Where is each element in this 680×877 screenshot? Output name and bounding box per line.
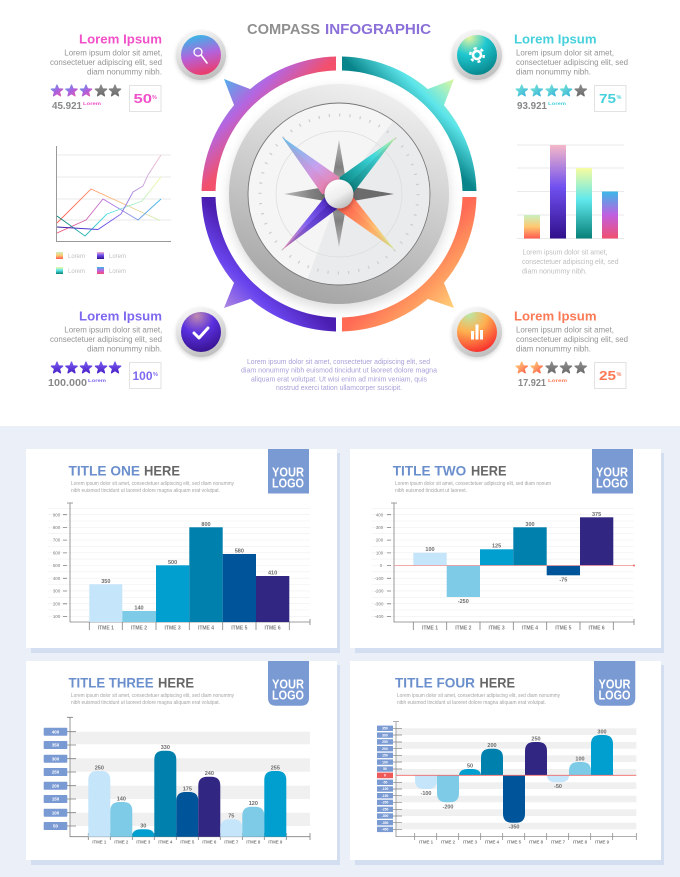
body text (50, 326, 162, 354)
logo: YOUR (598, 677, 630, 691)
heading: HERE (471, 463, 506, 479)
logo: YOUR (596, 465, 628, 479)
body text (50, 48, 162, 76)
body text: diam nonummy nibh. (87, 344, 162, 354)
logo: LOGO (272, 477, 304, 491)
logo (592, 449, 633, 494)
rounded bar chart: items 1 to 9: ITME 9 (268, 840, 283, 844)
logo: YOUR (272, 465, 304, 479)
percent box (594, 362, 626, 388)
bar chart: items 1 to 6: 900 (53, 512, 61, 517)
rounded bar chart: positive and negative values: -200 (382, 801, 389, 805)
rounded bar chart: positive and negative values: ITME 3 (463, 840, 478, 844)
rounded bar chart: items 1 to 9: 400 (52, 729, 60, 734)
block: top left (50, 30, 226, 112)
rounded bar chart: positive and negative values: -50 (383, 780, 388, 784)
block: bottom right (452, 307, 628, 389)
star rating (516, 362, 586, 373)
rounded bar chart: positive and negative values: ITME 1 (419, 840, 434, 844)
bar chart: positive and negative values: ITME 6 (589, 626, 605, 632)
rounded bar chart: positive and negative values: ITME 7 (551, 840, 566, 844)
number: Lorem (548, 378, 567, 383)
bar chart: items 1 to 6: 500 (168, 560, 177, 566)
description (395, 481, 551, 494)
panel: title four (350, 661, 664, 865)
title (247, 22, 432, 38)
description: nibh euismod tincidunt ut laoreet. (395, 488, 467, 494)
rounded bar chart: positive and negative values: 150 (382, 754, 388, 758)
heading: TITLE TWO (393, 463, 466, 479)
body text: Lorem ipsum dolor sit amet, (516, 326, 614, 334)
rounded bar chart: positive and negative values: -350 (508, 824, 520, 830)
line chart legend: Lorem (68, 254, 85, 260)
grey compass star (284, 140, 394, 247)
ring segment: top right (342, 57, 476, 191)
small gradient bar chart (517, 145, 624, 238)
rounded bar chart: items 1 to 9: 140 (117, 796, 126, 802)
logo (268, 661, 309, 706)
rounded bar chart: positive and negative values: 50 (467, 764, 473, 770)
rounded bar chart: positive and negative values: -50 (554, 784, 562, 790)
bar chart: positive and negative values: -400 (375, 614, 384, 619)
colour needles (282, 137, 396, 250)
bar chart: positive and negative values: ITME 5 (555, 626, 572, 632)
rounded bar chart: items 1 to 9: 200 (52, 783, 60, 788)
bar chart: positive and negative values: -75 (559, 578, 567, 584)
bar chart: items 1 to 6: ITME 4 (198, 626, 214, 632)
compass hub (324, 180, 354, 211)
title: INFOGRAPHIC (325, 22, 432, 38)
number: Lorem (548, 101, 566, 106)
rounded bar chart: items 1 to 9 (44, 717, 310, 844)
description: nibh euismod tincidunt ut laoreet dolore magna aliquam erat volutpat. (71, 488, 220, 494)
rounded bar chart: items 1 to 9: ITME 8 (246, 840, 261, 844)
percent box: 100 (132, 369, 153, 383)
description (71, 693, 234, 706)
bar chart: positive and negative values: -250 (458, 599, 469, 605)
heading (68, 463, 180, 479)
description: Lorem ipsum dolor sit amet, consectetuer adipiscing elit, sed diam nonummy (71, 693, 234, 699)
centre paragraph: aliquam erat volutpat. Ut wisi enim ad minim veniam, quis (251, 374, 427, 383)
heading: HERE (158, 674, 194, 690)
line chart legend: Lorem (109, 269, 126, 275)
panel: title one (26, 449, 340, 653)
bar chart: items 1 to 6: 140 (134, 606, 144, 612)
bar chart: positive and negative values: 375 (592, 512, 601, 518)
centre paragraph: nostrud exerci tation ullamcorper suscipit. (276, 383, 402, 392)
centre paragraph: diam nonummy nibh euismod tincidunt ut laoreet dolore magna (241, 366, 438, 375)
logo: YOUR (272, 677, 304, 691)
logo (594, 661, 635, 706)
number: 17.921 (518, 378, 546, 389)
body text: consectetuer adipiscing elit, sed (516, 58, 628, 67)
rounded bar chart: positive and negative values: 250 (531, 736, 541, 742)
rounded bar chart: positive and negative values: ITME 8 (573, 840, 588, 844)
icon: bar chart button (452, 307, 502, 359)
bar chart: positive and negative values: ITME 4 (522, 626, 538, 632)
rounded bar chart: items 1 to 9: 175 (183, 786, 192, 792)
bar chart: items 1 to 6: ITME 3 (165, 626, 181, 632)
description: nibh euismod tincidunt ut laoreet dolore magna aliquam erat volutpat. (71, 700, 220, 706)
rounded bar chart: items 1 to 9: ITME 3 (136, 840, 151, 844)
bar chart: positive and negative values: ITME 2 (455, 626, 472, 632)
rounded bar chart: items 1 to 9: 240 (205, 771, 214, 777)
ring segment: bottom left (202, 197, 336, 331)
star rating (516, 85, 586, 96)
rounded bar chart: positive and negative values: 200 (382, 747, 388, 751)
rounded bar chart: positive and negative values: ITME 2 (441, 840, 456, 844)
rounded bar chart: items 1 to 9: 75 (228, 814, 234, 820)
number (518, 378, 567, 389)
rounded bar chart: items 1 to 9: 330 (161, 745, 170, 751)
number (517, 101, 566, 112)
bar chart: items 1 to 6: 350 (101, 579, 110, 585)
percent box: 25 (599, 369, 616, 383)
heading: Lorem Ipsum (514, 32, 596, 46)
description (71, 481, 234, 494)
rounded bar chart: positive and negative values: -150 (382, 794, 389, 798)
logo: LOGO (598, 689, 631, 703)
rounded bar chart: items 1 to 9: 30 (140, 824, 146, 830)
rounded bar chart: items 1 to 9: 250 (95, 766, 104, 772)
rounded bar chart: positive and negative values: 300 (382, 733, 388, 737)
heading: TITLE ONE (68, 463, 140, 479)
rounded bar chart: items 1 to 9: 255 (271, 766, 280, 772)
description: Lorem ipsum dolor sit amet, consectetuer adipiscing elit, sed diam nonummy (397, 693, 560, 699)
compass dial (229, 84, 449, 309)
icon: magnifier button (176, 30, 226, 82)
rounded bar chart: items 1 to 9: ITME 1 (92, 840, 107, 844)
heading: HERE (144, 463, 180, 479)
line chart legend (56, 252, 126, 275)
block: top right (452, 30, 628, 112)
body text: diam nonummy nibh. (87, 68, 162, 76)
rounded bar chart: positive and negative values: -250 (382, 808, 389, 812)
heading (393, 463, 506, 479)
rounded bar chart: items 1 to 9: 150 (52, 797, 60, 802)
bar chart: positive and negative values: -300 (375, 601, 384, 606)
panel: title three (26, 661, 340, 865)
bar chart: positive and negative values: 100 (425, 547, 435, 553)
heading: Lorem Ipsum (79, 308, 162, 324)
number (48, 378, 106, 389)
description (397, 693, 560, 706)
description: nibh euismod tincidunt ut laoreet dolore magna aliquam erat volutpat. (397, 700, 546, 706)
rounded bar chart: positive and negative values: ITME 8 (529, 840, 544, 844)
logo: LOGO (272, 689, 304, 703)
heading: Lorem Ipsum (79, 32, 162, 46)
rounded bar chart: positive and negative values: -300 (382, 814, 389, 818)
block: bottom left (48, 307, 226, 389)
body text: consectetuer adipiscing elit, sed (50, 335, 162, 344)
bar chart caption: consectetuer adipiscing elit, sed (522, 257, 618, 266)
rounded bar chart: positive and negative values: ITME 9 (595, 840, 610, 844)
bar chart: positive and negative values: 100 (376, 550, 384, 556)
bar chart: positive and negative values: -200 (375, 589, 384, 594)
heading: Lorem Ipsum (514, 308, 596, 324)
bar chart caption: diam nonummy nibh. (522, 266, 587, 276)
rounded bar chart: positive and negative values: -400 (382, 828, 389, 832)
bar chart: positive and negative values: 300 (376, 525, 384, 530)
rounded bar chart: positive and negative values: 0 (384, 774, 386, 778)
heading: TITLE FOUR (395, 674, 475, 690)
bar chart: items 1 to 6: ITME 2 (131, 626, 147, 632)
bar chart: items 1 to 6: 400 (53, 576, 61, 581)
rounded bar chart: positive and negative values: ITME 4 (485, 840, 500, 844)
body text (516, 326, 628, 354)
bar chart: items 1 to 6: 800 (201, 522, 211, 528)
bar chart: positive and negative values: 200 (376, 538, 384, 543)
line chart legend: Lorem (68, 269, 85, 275)
description: Lorem ipsum dolor sit amet, consectetuer adipiscing elit, sed diam nonummy (71, 481, 234, 487)
bar chart: positive and negative values: 400 (376, 512, 384, 517)
percent box: 50 (134, 92, 152, 106)
bar chart: items 1 to 6: 500 (53, 563, 61, 568)
percent box: % (152, 95, 157, 101)
body text: Lorem ipsum dolor sit amet, (516, 48, 614, 58)
bar chart: positive and negative values: 300 (525, 522, 535, 528)
percent box: % (153, 372, 158, 378)
bar chart: items 1 to 6: 700 (53, 538, 61, 543)
number: 93.921 (517, 101, 547, 112)
bar chart caption: Lorem ipsum dolor sit amet, (522, 248, 608, 256)
rounded bar chart: positive and negative values: -100 (382, 787, 389, 791)
line chart (56, 146, 171, 242)
number (52, 101, 101, 112)
ring segment: top left (202, 57, 336, 191)
bar chart: items 1 to 6: ITME 6 (265, 626, 281, 632)
bar chart: items 1 to 6: ITME 5 (231, 626, 248, 632)
rounded bar chart: positive and negative values: 100 (575, 756, 585, 762)
bar chart: items 1 to 6: 800 (53, 525, 61, 530)
bar chart: items 1 to 6: 300 (53, 589, 61, 594)
body text: diam nonummy nibh. (516, 68, 591, 76)
rounded bar chart: positive and negative values: 250 (382, 740, 388, 744)
bar chart: items 1 to 6: 410 (268, 570, 277, 576)
bar chart caption (522, 248, 618, 276)
rounded bar chart: items 1 to 9: ITME 2 (114, 840, 129, 844)
rounded bar chart: items 1 to 9: 120 (249, 801, 258, 807)
title: COMPASS (247, 22, 320, 38)
percent box (594, 86, 626, 112)
rounded bar chart: items 1 to 9: 50 (53, 824, 58, 829)
rounded bar chart: items 1 to 9: ITME 5 (180, 840, 195, 844)
description: Lorem ipsum dolor sit amet, consectetuer adipiscing elit, sed diam nonum (395, 481, 551, 487)
bar chart: positive and negative values: 0 (380, 563, 383, 568)
heading: HERE (480, 674, 515, 690)
rounded bar chart: positive and negative values: 300 (597, 730, 607, 736)
percent box: % (616, 372, 622, 378)
centre paragraph (241, 357, 438, 392)
rounded bar chart: positive and negative values: 100 (382, 760, 388, 764)
panel: title two (350, 449, 664, 653)
ring segment: bottom right (342, 197, 476, 331)
bar chart: items 1 to 6: ITME 1 (98, 626, 114, 632)
line chart legend: Lorem (109, 254, 126, 260)
number: Lorem (83, 101, 101, 106)
rounded bar chart: positive and negative values: -350 (382, 821, 389, 825)
centre paragraph: Lorem ipsum dolor sit amet, consectetuer adipiscing elit, sed (247, 357, 430, 366)
star rating (51, 362, 121, 373)
bar chart: items 1 to 6: 600 (53, 550, 61, 556)
rounded bar chart: items 1 to 9: 300 (52, 756, 60, 761)
heading (395, 674, 515, 690)
page background: lower section (0, 426, 680, 877)
bar chart: positive and negative values (372, 503, 635, 632)
rounded bar chart: positive and negative values (377, 722, 636, 844)
bar chart: positive and negative values: -100 (375, 576, 384, 581)
number: 45.921 (52, 101, 82, 112)
rounded bar chart: positive and negative values: 50 (383, 767, 387, 771)
bar chart: positive and negative values: ITME 1 (422, 626, 438, 632)
body text: consectetuer adipiscing elit, sed (516, 335, 628, 344)
body text: Lorem ipsum dolor sit amet, (64, 326, 162, 334)
body text: Lorem ipsum dolor sit amet, (64, 48, 162, 58)
bar chart: items 1 to 6: 580 (235, 548, 244, 554)
bar chart: positive and negative values: 125 (492, 544, 501, 550)
percent box (130, 86, 161, 112)
percent box: 75 (599, 92, 616, 106)
logo (268, 449, 309, 494)
body text: diam nonummy nibh. (516, 344, 591, 354)
icon: check button (176, 307, 226, 359)
bar chart: items 1 to 6: 200 (53, 601, 61, 606)
icon: gear button (452, 30, 502, 82)
logo: LOGO (596, 477, 628, 491)
body text: consectetuer adipiscing elit, sed (50, 58, 162, 67)
rounded bar chart: items 1 to 9: 350 (52, 743, 60, 748)
heading: TITLE THREE (68, 674, 154, 690)
star rating (51, 85, 121, 96)
bar chart: items 1 to 6 (48, 503, 310, 632)
bar chart: items 1 to 6: 100 (53, 614, 61, 619)
number: 100.000 (48, 378, 87, 389)
percent box (130, 362, 161, 388)
bar chart: positive and negative values: ITME 3 (489, 626, 505, 632)
rounded bar chart: positive and negative values: 350 (382, 726, 388, 730)
rounded bar chart: items 1 to 9: 250 (52, 770, 60, 775)
rounded bar chart: positive and negative values: -100 (420, 791, 432, 797)
number: Lorem (88, 378, 106, 383)
compass ring with four arrows (202, 57, 476, 331)
percent box: % (616, 95, 622, 101)
rounded bar chart: positive and negative values: 200 (487, 743, 497, 749)
rounded bar chart: items 1 to 9: ITME 7 (224, 840, 239, 844)
body text (516, 48, 628, 76)
rounded bar chart: items 1 to 9: ITME 4 (158, 840, 173, 844)
rounded bar chart: positive and negative values: -200 (442, 804, 454, 810)
rounded bar chart: items 1 to 9: ITME 6 (202, 840, 217, 844)
rounded bar chart: positive and negative values: ITME 5 (507, 840, 522, 844)
rounded bar chart: items 1 to 9: 100 (52, 810, 60, 815)
